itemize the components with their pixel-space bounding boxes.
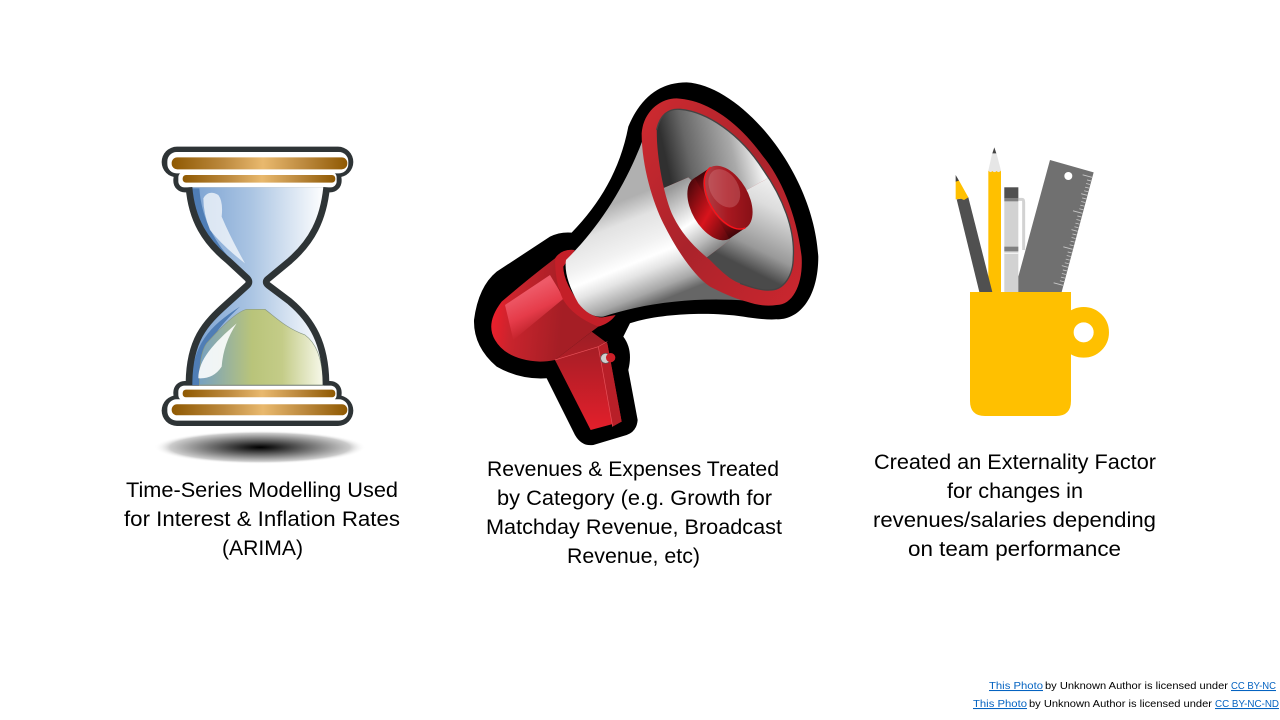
- photo credits: by Unknown Author is licensed under: [1045, 680, 1229, 692]
- hourglass sand: [199, 309, 323, 385]
- top cap gold bars: [172, 157, 347, 183]
- megaphone cone interior: [656, 110, 793, 290]
- caption: time-series modelling: (ARIMA): [222, 536, 303, 560]
- megaphone black outline: [474, 82, 818, 445]
- photo credits: CC BY-NC: [1231, 680, 1276, 692]
- megaphone bell: [566, 138, 747, 317]
- cone inner edge: [657, 109, 793, 290]
- megaphone body: [491, 258, 598, 362]
- megaphone collar: [555, 250, 616, 327]
- glass outline: [189, 187, 327, 385]
- icon: pencil mug: [956, 147, 1101, 416]
- megaphone rim: [642, 98, 802, 306]
- caption: revenues and expenses: [486, 457, 782, 568]
- icon: hourglass: [154, 147, 366, 464]
- caption: time-series modelling: Time-Series Modelling Used: [126, 478, 398, 502]
- glass dark blue edges: [192, 188, 240, 385]
- yellow pencil: [988, 147, 1001, 292]
- megaphone handle: [555, 332, 622, 430]
- caption: revenues and expenses: Matchday Revenue, Broadcast: [486, 515, 782, 539]
- body highlight: [505, 275, 564, 340]
- photo credits: [973, 680, 1279, 710]
- caption: externality factor: for changes in: [947, 479, 1083, 503]
- hourglass shadow: [154, 431, 366, 464]
- megaphone button: [601, 353, 615, 363]
- caption: externality factor: Created an Externality Factor: [874, 450, 1156, 474]
- caption: externality factor: revenues/salaries depending: [873, 508, 1156, 532]
- pen: [1004, 187, 1024, 292]
- caption: revenues and expenses: Revenues & Expenses Treated: [487, 457, 779, 481]
- photo credits: This Photo: [989, 680, 1043, 692]
- megaphone centre cap: [677, 157, 763, 249]
- left pencil: [956, 175, 992, 292]
- bottom cap gold bars: [172, 390, 347, 415]
- cap frames: [162, 147, 353, 426]
- photo credits: This Photo: [973, 698, 1027, 710]
- caption: revenues and expenses: Revenue, etc): [567, 544, 700, 568]
- photo credits: by Unknown Author is licensed under: [1029, 698, 1213, 710]
- caption: revenues and expenses: by Category (e.g. Growth for: [497, 486, 772, 510]
- caption: externality factor: on team performance: [908, 537, 1121, 561]
- caption: time-series modelling: [124, 478, 400, 560]
- caption: time-series modelling: for Interest & Inflation Rates: [124, 507, 400, 531]
- mug: [970, 292, 1101, 416]
- glass highlights: [198, 193, 245, 378]
- icon: megaphone: [474, 82, 818, 445]
- hourglass glass: [189, 187, 327, 385]
- caption: externality factor: [873, 450, 1156, 561]
- ruler: [1018, 160, 1094, 292]
